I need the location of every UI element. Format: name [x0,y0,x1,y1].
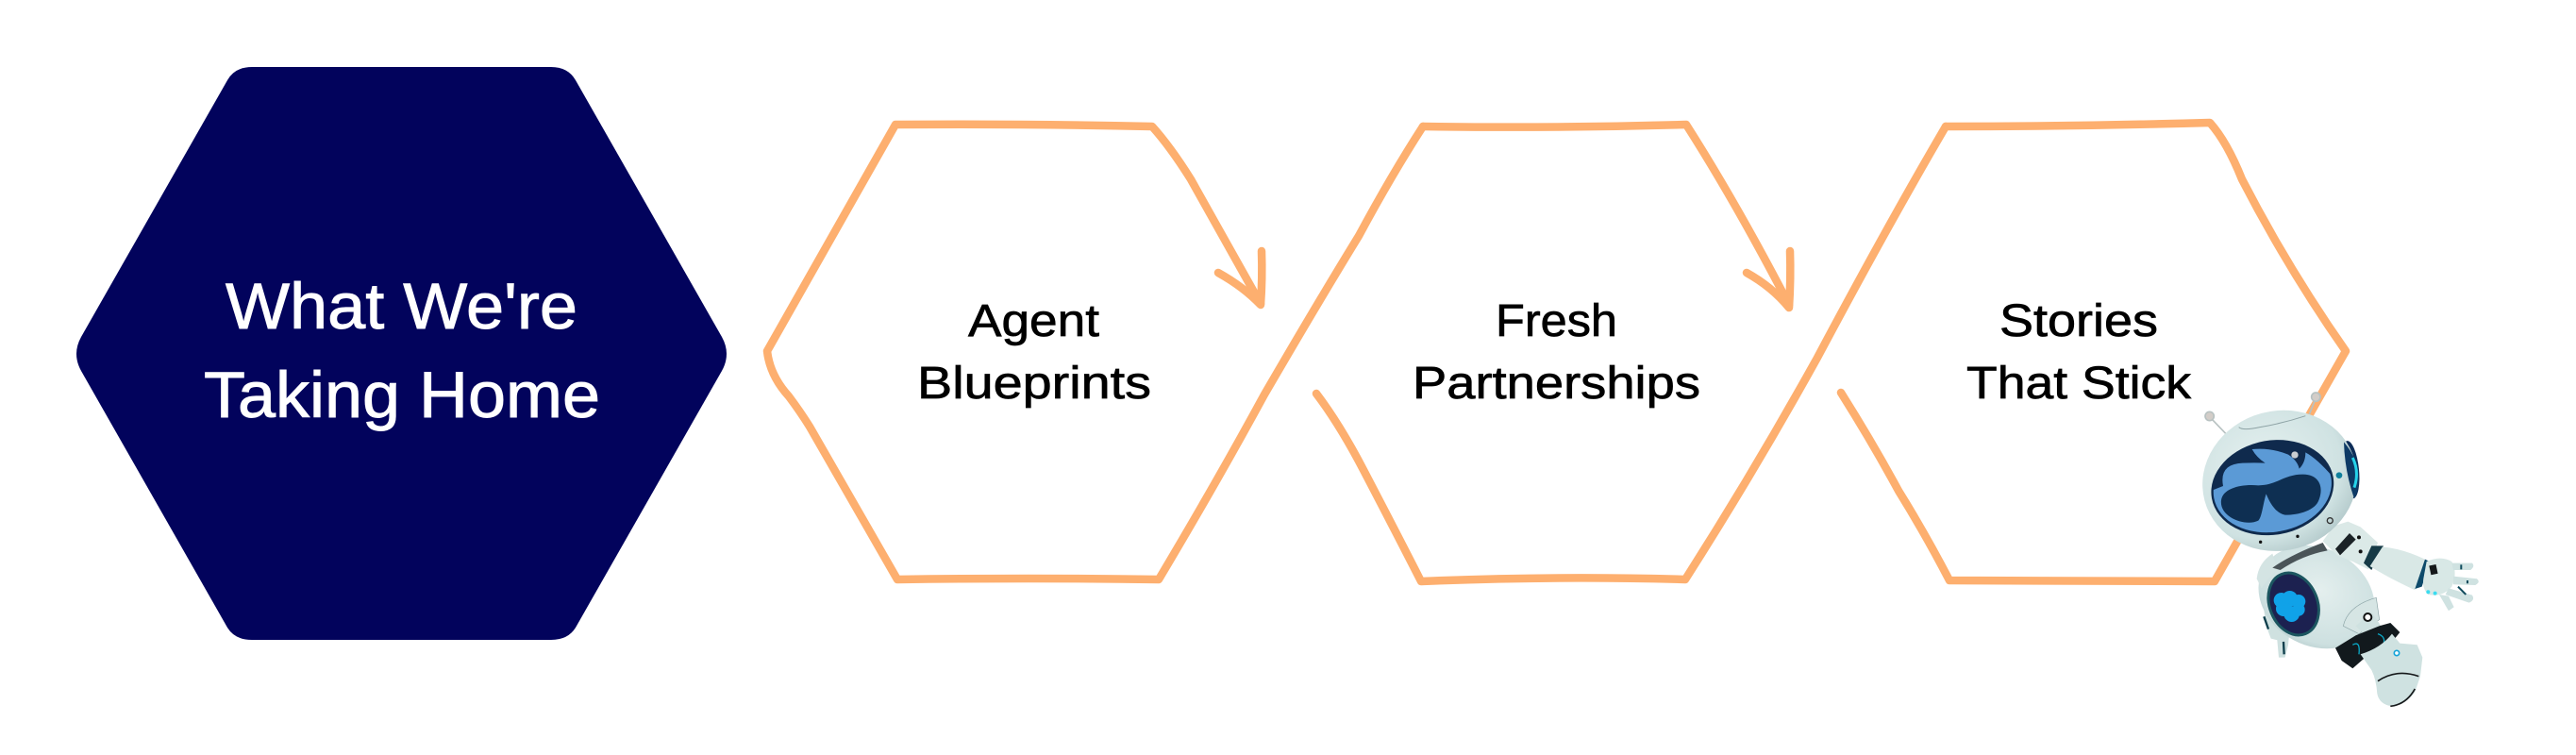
robot mascot [2186,393,2479,706]
label: Fresh Partnerships: Fresh [1496,296,1617,346]
title text [204,270,600,431]
label: Stories That Stick [1966,296,2192,409]
robot neck [2272,543,2328,570]
robot hip and leg [2335,597,2422,706]
label: Fresh Partnerships [1413,296,1700,409]
robot chest badge [2259,565,2328,643]
robot visor [2211,440,2334,536]
robot sunglasses [2221,475,2321,523]
step 3 outline: Stories That Stick [1841,123,2346,581]
robot left hand [2260,579,2290,658]
robot ear [2338,440,2362,499]
title text: What We're [226,270,577,343]
label: Stories That Stick: That Stick [1966,359,2192,409]
robot arm [2323,522,2479,611]
label: Stories That Stick: Stories [1999,296,2158,346]
title text: Taking Home [204,359,600,431]
robot face and hair [2214,449,2332,532]
title hexagon [76,67,727,640]
label: Fresh Partnerships: Partnerships [1413,359,1700,409]
robot hand [2423,559,2479,611]
step 1 outline with arrow: Agent Blueprints [767,125,1423,579]
robot antennae [2205,393,2320,433]
robot body [2240,526,2393,668]
robot head [2202,410,2359,551]
label: Agent Blueprints: Blueprints [917,359,1151,409]
step 2 outline with arrow: Fresh Partnerships [1316,125,1946,581]
label: Agent Blueprints [917,296,1151,409]
salesforce cloud [2274,591,2305,622]
label: Agent Blueprints: Agent [968,296,1099,346]
